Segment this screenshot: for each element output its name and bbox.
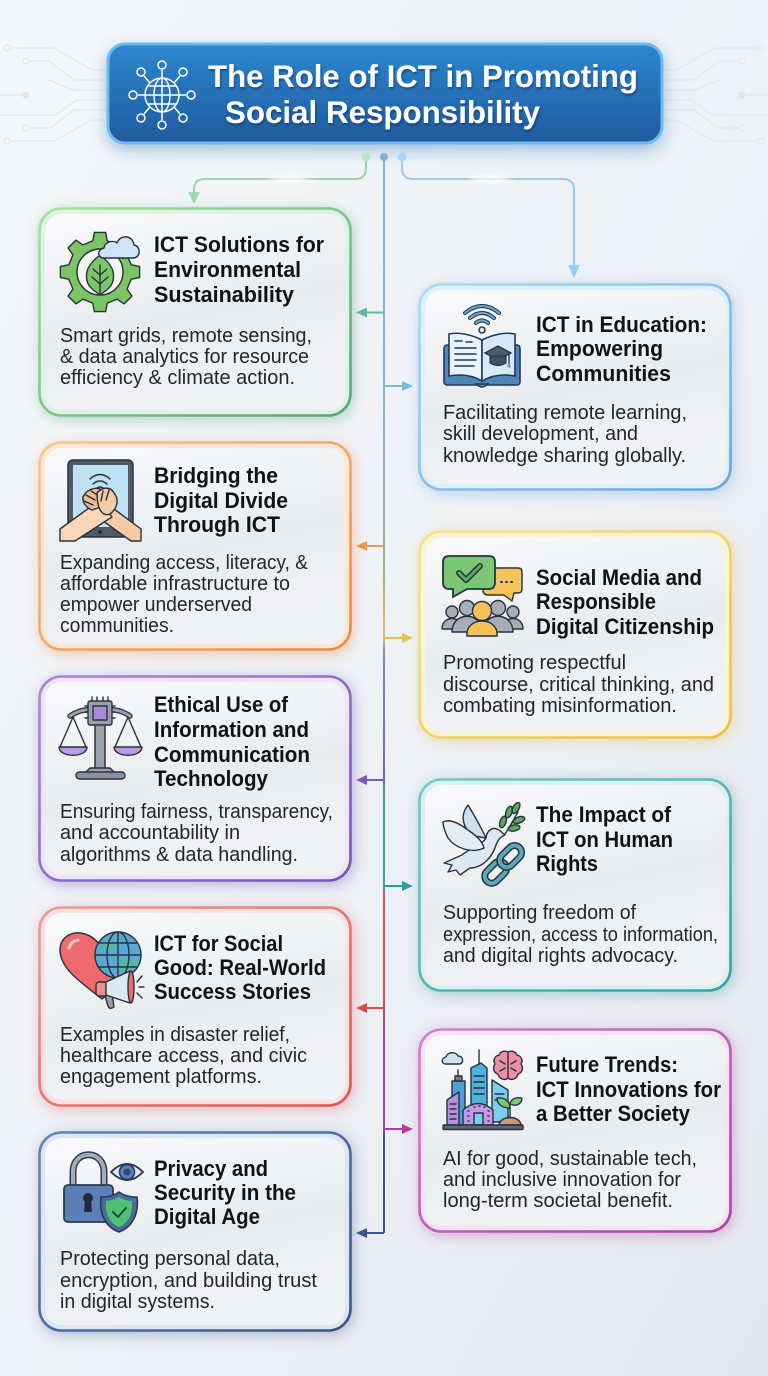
body text bbox=[60, 325, 312, 389]
body text: encryption, and building trust bbox=[60, 1270, 317, 1292]
connector arrow: to education card bbox=[398, 152, 580, 278]
heading bbox=[154, 692, 310, 791]
body text: Promoting respectful bbox=[443, 652, 626, 674]
heading: ICT for Social bbox=[154, 931, 283, 956]
heading bbox=[536, 312, 707, 386]
body text bbox=[60, 1024, 307, 1088]
body text: communities. bbox=[60, 615, 174, 637]
body text: efficiency & climate action. bbox=[60, 367, 295, 389]
heading: Information and bbox=[154, 717, 309, 742]
heading: Ethical Use of bbox=[154, 692, 289, 717]
body text: Supporting freedom of bbox=[443, 902, 636, 924]
icon: speech bubbles and people bbox=[442, 556, 523, 636]
heading: Digital Divide bbox=[154, 488, 288, 513]
heading: Through ICT bbox=[154, 512, 281, 537]
body text bbox=[443, 402, 687, 467]
heading: ICT in Education: bbox=[536, 312, 707, 337]
body text: Protecting personal data, bbox=[60, 1248, 280, 1270]
connector: central spine bbox=[380, 153, 388, 1233]
arrow: red branch bbox=[356, 1003, 384, 1013]
body text bbox=[60, 552, 309, 637]
body text: in digital systems. bbox=[60, 1291, 215, 1313]
title text: The Role of ICT in Promoting bbox=[208, 58, 638, 94]
panel: future trends bbox=[420, 1030, 730, 1232]
body text bbox=[60, 1248, 317, 1313]
heading: Good: Real-World bbox=[154, 955, 326, 980]
heading bbox=[536, 1052, 721, 1126]
heading: Digital Citizenship bbox=[536, 614, 714, 639]
heading: a Better Society bbox=[536, 1101, 691, 1126]
heading: Bridging the bbox=[154, 463, 278, 488]
panel: social media bbox=[420, 532, 730, 738]
icon: book wifi cap bbox=[444, 306, 520, 387]
icon: heart globe megaphone bbox=[60, 932, 144, 1008]
icon: network globe bbox=[129, 61, 195, 129]
connector arrow: to environmental card bbox=[188, 152, 370, 204]
heading: Digital Age bbox=[154, 1204, 260, 1229]
arrow: orange branch bbox=[356, 541, 384, 551]
body text: engagement platforms. bbox=[60, 1066, 262, 1088]
panel: environmental sustainability bbox=[40, 208, 350, 416]
body text: discourse, critical thinking, and bbox=[443, 674, 714, 696]
heading: Communication bbox=[154, 742, 310, 767]
body text: knowledge sharing globally. bbox=[443, 445, 686, 467]
heading bbox=[154, 232, 324, 307]
icon: lock eye shield bbox=[64, 1155, 143, 1232]
heading: Environmental bbox=[154, 257, 301, 282]
body text: combating misinformation. bbox=[443, 695, 677, 717]
body text: Facilitating remote learning, bbox=[443, 402, 687, 424]
title banner bbox=[108, 44, 662, 143]
heading: ICT Innovations for bbox=[536, 1077, 721, 1102]
panel: human rights bbox=[420, 780, 730, 990]
body text: skill development, and bbox=[443, 423, 638, 445]
heading bbox=[154, 931, 326, 1004]
body text: Smart grids, remote sensing, bbox=[60, 325, 312, 347]
heading: Success Stories bbox=[154, 979, 311, 1004]
heading bbox=[154, 463, 288, 537]
body text: Examples in disaster relief, bbox=[60, 1024, 290, 1046]
heading: Technology bbox=[154, 766, 269, 791]
arrow: magenta branch bbox=[384, 1124, 413, 1134]
body text: expression, access to information, bbox=[443, 924, 718, 946]
icon: tablet handshake bbox=[60, 460, 141, 541]
body text bbox=[443, 652, 714, 717]
body text: empower underserved bbox=[60, 594, 252, 616]
body text: algorithms & data handling. bbox=[60, 844, 298, 866]
icon: smart city brain plant bbox=[442, 1050, 523, 1130]
heading: Privacy and bbox=[154, 1156, 268, 1181]
panel: education bbox=[420, 284, 730, 490]
body text: long-term societal benefit. bbox=[443, 1190, 673, 1212]
arrow: teal branch bbox=[384, 881, 413, 891]
title text bbox=[208, 58, 638, 130]
heading: Communities bbox=[536, 361, 671, 386]
body text: and accountability in bbox=[60, 822, 240, 844]
heading: Empowering bbox=[536, 336, 663, 361]
body text: Ensuring fairness, transparency, bbox=[60, 801, 333, 823]
arrow: green branch bbox=[356, 308, 384, 318]
icon: dove and broken chain bbox=[443, 801, 526, 886]
arrow: navy branch bbox=[356, 1228, 384, 1238]
body text: and inclusive innovation for bbox=[443, 1169, 681, 1191]
body text: Expanding access, literacy, & bbox=[60, 552, 309, 574]
heading: Rights bbox=[536, 851, 598, 876]
heading bbox=[536, 802, 673, 876]
body text: AI for good, sustainable tech, bbox=[443, 1148, 697, 1170]
arrow: blue branch bbox=[384, 381, 413, 391]
heading: Security in the bbox=[154, 1180, 296, 1205]
body text: & data analytics for resource bbox=[60, 346, 309, 368]
body text bbox=[443, 902, 718, 967]
panel: privacy and security bbox=[40, 1132, 350, 1330]
panel: ethical use bbox=[40, 676, 350, 880]
heading: Social Media and bbox=[536, 565, 702, 590]
heading: Sustainability bbox=[154, 282, 295, 307]
icon: scales with chip bbox=[59, 697, 142, 779]
body text: healthcare access, and civic bbox=[60, 1045, 307, 1067]
heading: ICT Solutions for bbox=[154, 232, 324, 257]
panel: social good bbox=[40, 908, 350, 1106]
panel: digital divide bbox=[40, 442, 350, 650]
arrow: purple branch bbox=[356, 775, 384, 785]
body text: and digital rights advocacy. bbox=[443, 945, 678, 967]
arrow: yellow branch bbox=[384, 633, 413, 643]
heading: ICT on Human bbox=[536, 827, 673, 852]
heading bbox=[536, 565, 714, 639]
body text: affordable infrastructure to bbox=[60, 573, 290, 595]
body text bbox=[60, 801, 333, 866]
icon: gear leaf cloud bbox=[60, 232, 140, 312]
heading bbox=[154, 1156, 296, 1229]
title text: Social Responsibility bbox=[225, 94, 540, 130]
heading: Future Trends: bbox=[536, 1052, 678, 1077]
heading: The Impact of bbox=[536, 802, 672, 827]
heading: Responsible bbox=[536, 589, 656, 614]
body text bbox=[443, 1148, 697, 1212]
